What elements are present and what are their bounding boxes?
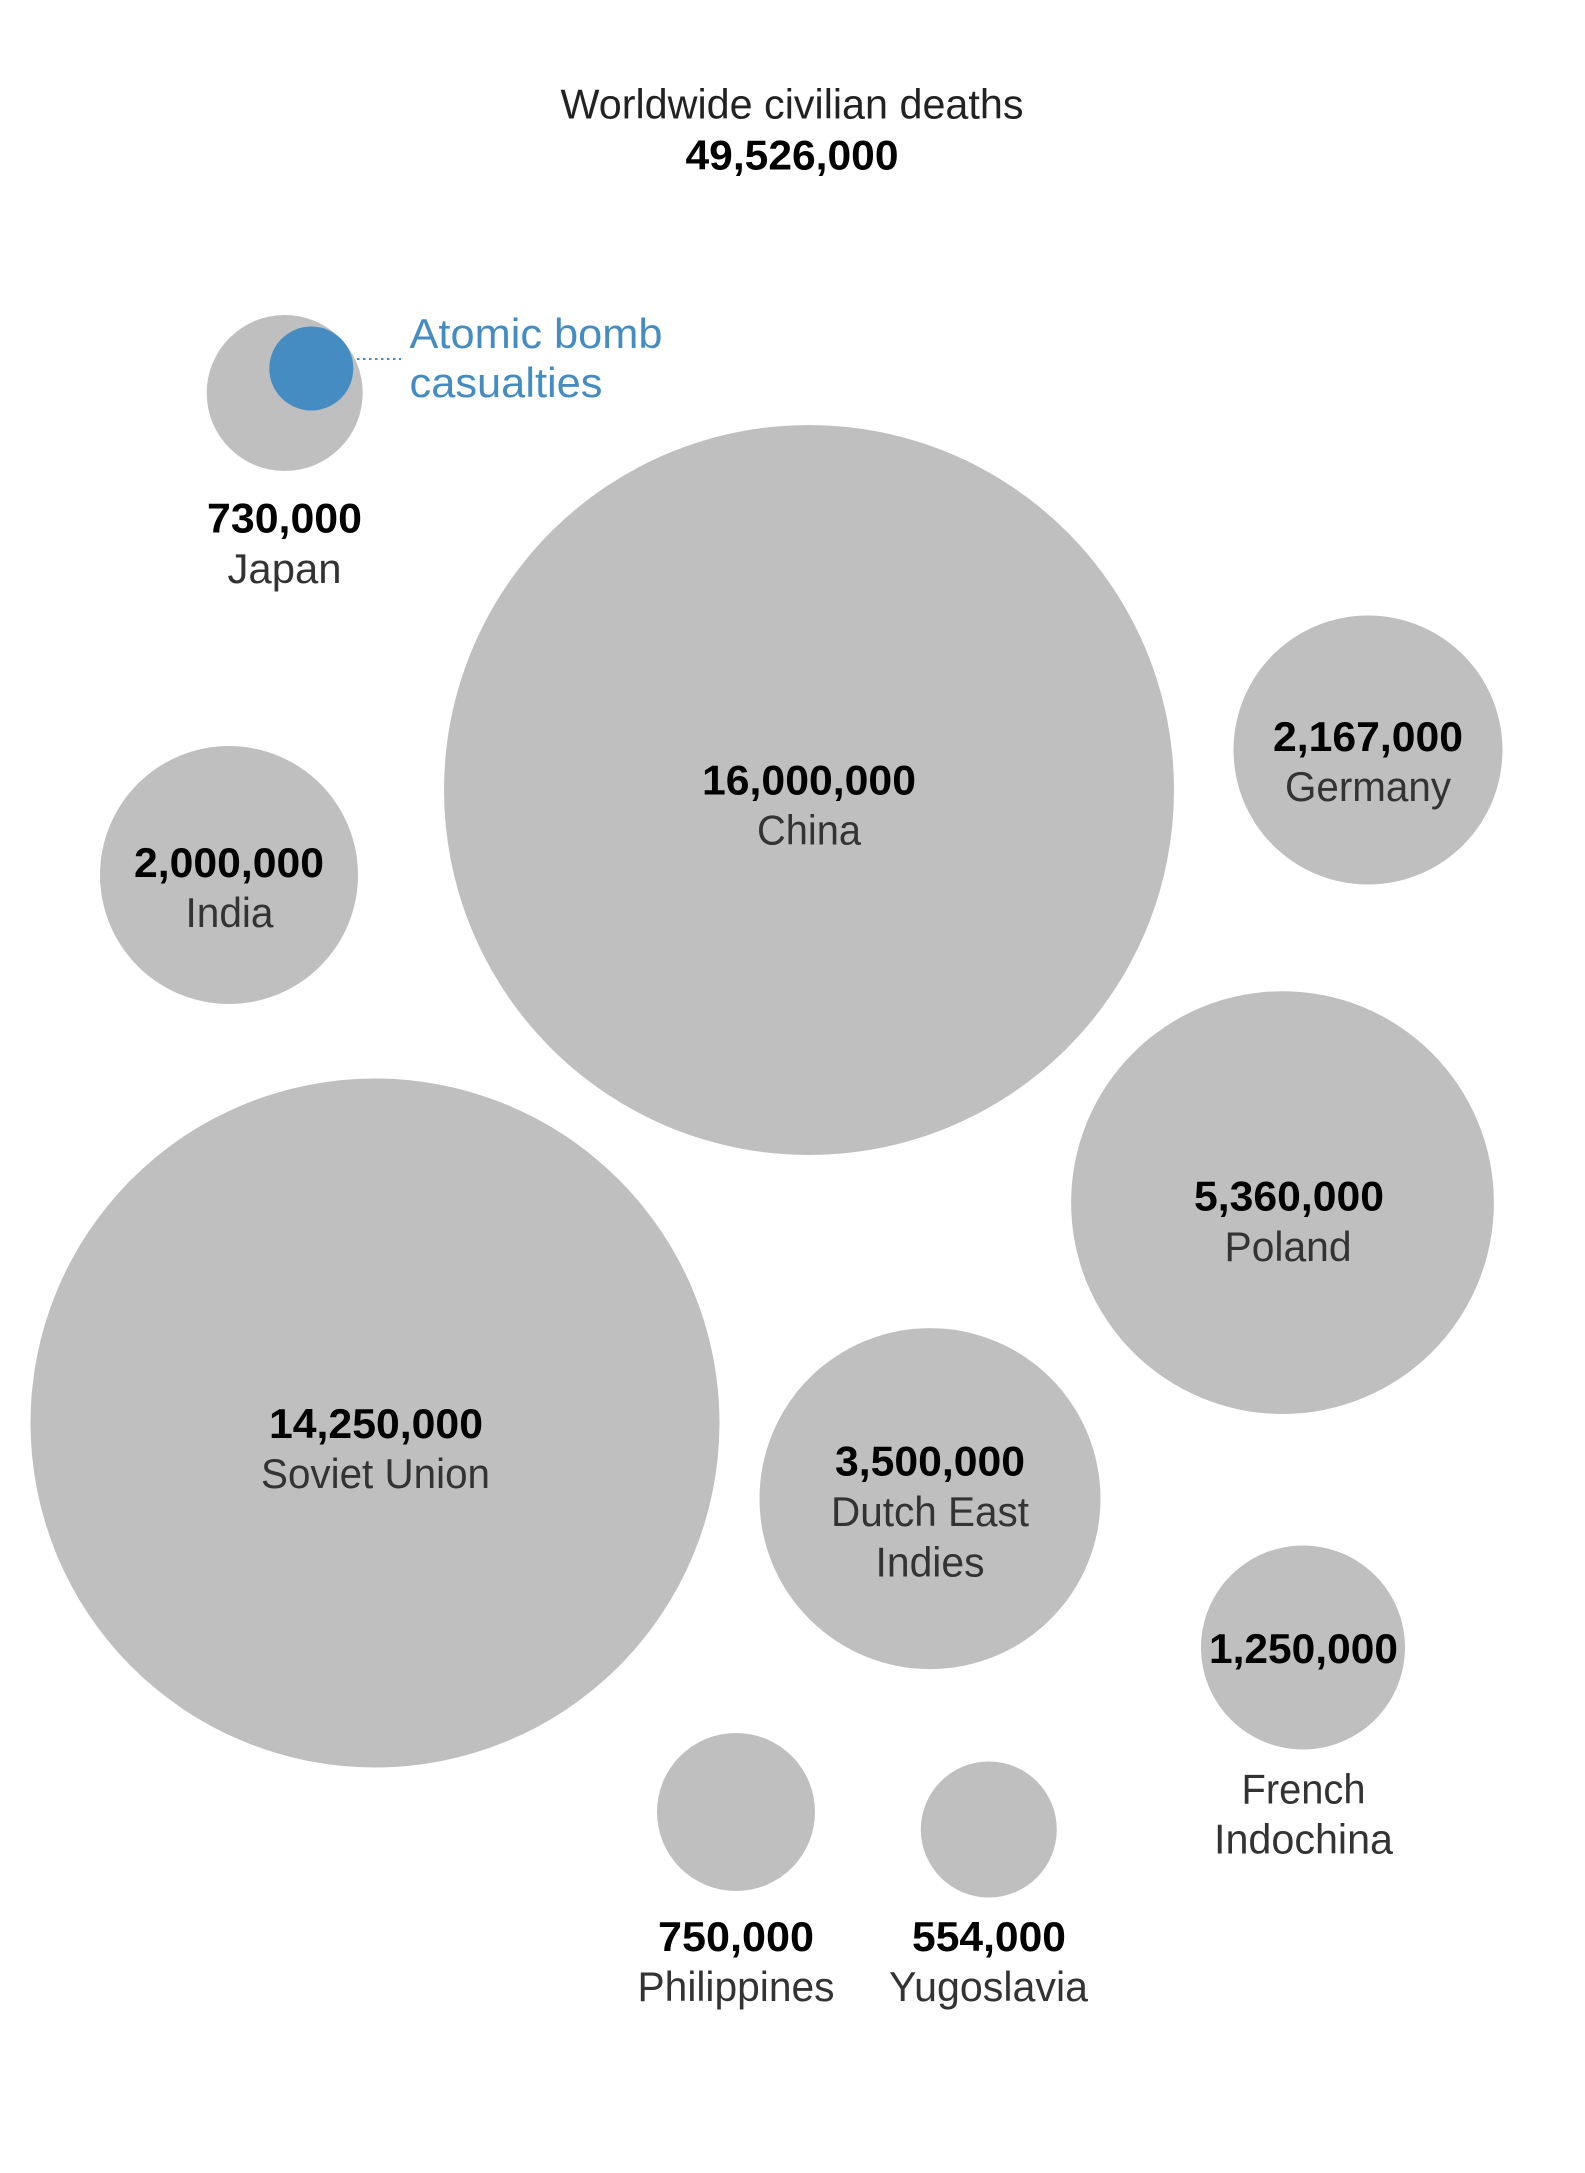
bubble: India (100, 746, 358, 1004)
label: Japan: Japan (228, 545, 342, 592)
bubble: China: China (757, 806, 862, 854)
bubble: Germany: Germany (1285, 763, 1451, 810)
bubble: Poland: Poland (1224, 1223, 1352, 1270)
title (560, 80, 1024, 178)
bubble: Poland (1071, 991, 1494, 1414)
label: Philippines: 750,000 (658, 1913, 814, 1960)
label: Japan: 730,000 (207, 494, 362, 542)
bubble: China: 16,000,000 (702, 756, 916, 804)
leader line: atomic bomb (357, 358, 401, 360)
bubble: Yugoslavia (889, 1762, 1089, 2010)
callout: atomic bomb casualties: Atomic bomb (410, 310, 662, 357)
bubble: French Indochina: 1,250,000 (1209, 1625, 1398, 1672)
icon: atomic bomb casualties circle (269, 326, 353, 410)
bubble: Dutch East Indies: Dutch East (831, 1488, 1029, 1535)
bubble: French Indochina (1201, 1546, 1405, 1862)
bubble: Germany (1234, 616, 1502, 884)
label: Yugoslavia: 554,000 (912, 1913, 1066, 1960)
title: Worldwide civilian deaths (560, 80, 1024, 128)
bubble: Soviet Union: Soviet Union (261, 1450, 490, 1497)
label: French Indochina (1214, 1766, 1394, 1862)
label: Philippines: Philippines (638, 1963, 834, 2010)
bubble: Soviet Union (30, 1078, 720, 1768)
bubble: Soviet Union: 14,250,000 (269, 1400, 483, 1447)
bubble: Philippines (638, 1733, 834, 2010)
callout: atomic bomb casualties: casualties (410, 359, 602, 406)
bubble: Germany: 2,167,000 (1273, 713, 1463, 760)
bubble: Dutch East Indies: 3,500,000 (835, 1438, 1025, 1484)
bubble: Dutch East Indies (760, 1328, 1100, 1669)
label: Philippines (638, 1913, 834, 2010)
bubble: India: 2,000,000 (134, 839, 324, 886)
label: French Indochina: French (1242, 1766, 1366, 1812)
title: 49,526,000 (686, 132, 898, 178)
label: Yugoslavia: Yugoslavia (889, 1963, 1089, 2010)
label: Yugoslavia (889, 1913, 1089, 2010)
callout: atomic bomb casualties (410, 310, 662, 406)
label: French Indochina: Indochina (1214, 1816, 1394, 1862)
bubble: Dutch East Indies: Indies (876, 1538, 984, 1586)
bubble: India: India (186, 889, 274, 936)
bubble: Poland: 5,360,000 (1194, 1172, 1384, 1220)
bubble: Japan (207, 310, 662, 592)
bubble: China (444, 425, 1174, 1155)
label: Japan (207, 494, 362, 592)
